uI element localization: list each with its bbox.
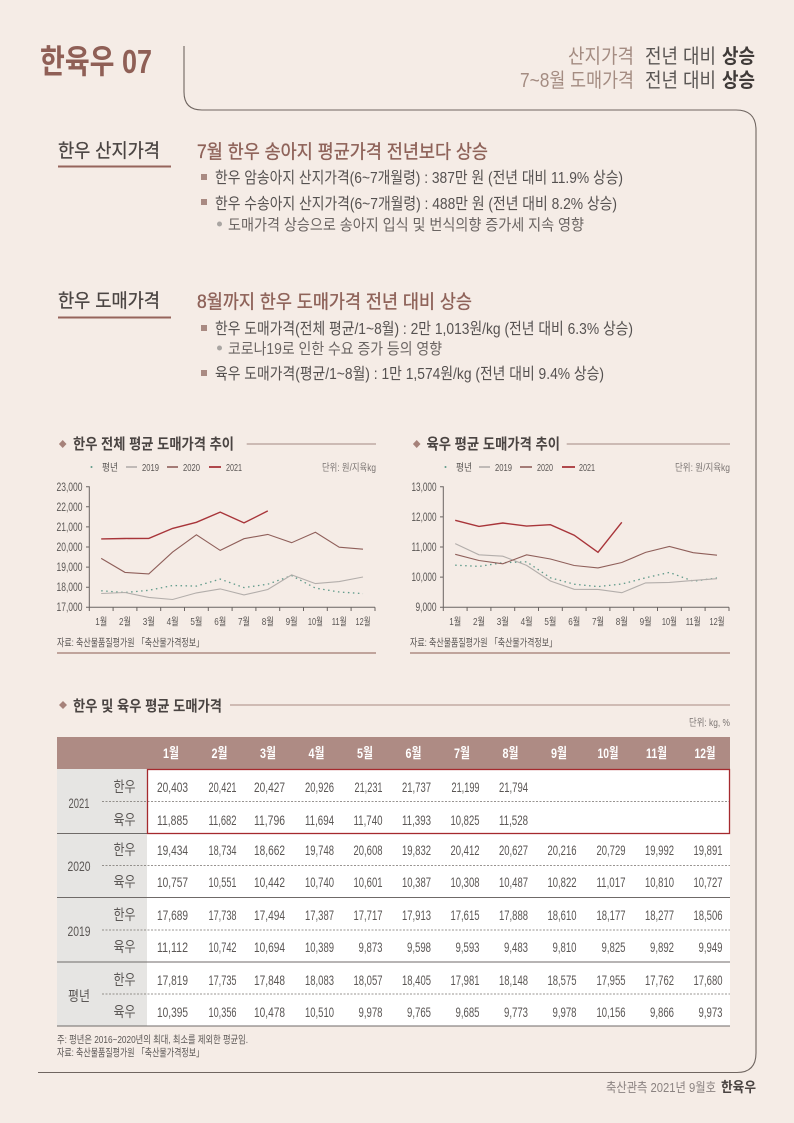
table header: 6월	[406, 745, 422, 761]
table header: 4월	[308, 745, 324, 761]
row group: 2021: 11,796	[254, 813, 285, 828]
row group: 2020: 10,740	[305, 875, 334, 890]
x axis labels: beef cattle: 10월	[662, 616, 677, 628]
x axis labels: hanwoo: 8월	[262, 616, 274, 628]
header summary	[520, 45, 755, 92]
line: hanwoo 2020	[101, 532, 363, 574]
legend: hanwoo	[90, 461, 376, 474]
header summary: 상승	[722, 45, 755, 68]
legend: hanwoo: 평년	[102, 462, 118, 474]
row group: 2020: 한우	[114, 842, 136, 859]
table header: 9월	[551, 745, 567, 761]
row group: 2020: 20,627	[499, 843, 528, 858]
row group: normal year: 9,978	[358, 1005, 382, 1020]
note: wholesale cause: 코로나19로 인한 수요 증가 등의 영향	[228, 340, 442, 358]
row group: 2019: 9,598	[407, 940, 431, 955]
row group: 2021: 20,926	[305, 780, 334, 795]
panel: hanwoo calf price	[58, 140, 623, 234]
row group: 2019: 10,389	[305, 940, 334, 955]
x axis labels: hanwoo: 2월	[119, 616, 131, 628]
source: hanwoo chart: 자료: 축산물품질평가원 「축산물가격정보」	[57, 636, 204, 649]
row group: normal year: 평년	[68, 988, 90, 1004]
row group: 2021: 21,737	[402, 780, 431, 795]
table notes	[57, 1033, 248, 1059]
table header: 7월	[454, 745, 470, 761]
header summary: 상승	[722, 69, 755, 92]
note: calf cause: 도매가격 상승으로 송아지 입식 및 번식의향 증가세 지속 영향	[228, 216, 584, 234]
row group: 2020: 10,822	[548, 875, 576, 890]
row group: 2021: 20,427	[254, 780, 285, 795]
row group: 2021	[68, 779, 528, 829]
row group: 2020: 10,551	[208, 875, 236, 890]
table header: 11월	[646, 745, 667, 761]
x axis labels: beef cattle: 6월	[568, 616, 580, 628]
x axis labels: hanwoo: 1월	[95, 616, 107, 628]
row group: 2021: 11,393	[402, 813, 431, 828]
footer: 축산관측 2021년 9월호	[606, 1080, 716, 1095]
row group: normal year: 9,866	[650, 1005, 674, 1020]
row group: 2019: 17,717	[354, 908, 382, 923]
heading: calf price: 한우 산지가격	[58, 140, 160, 162]
row group: 2021: 11,740	[354, 813, 382, 828]
row group: 2019: 2019	[68, 923, 91, 939]
row group: 2020: 18,734	[208, 843, 237, 858]
data table	[57, 737, 730, 1026]
row group: 2019: 9,873	[358, 940, 382, 955]
y axis labels: hanwoo: 23,000	[56, 482, 82, 494]
subheading: wholesale price: 8월까지 한우 도매가격 전년 대비 상승	[197, 291, 472, 313]
row group: 2020: 11,017	[596, 875, 626, 890]
row group: normal year: 10,478	[254, 1005, 285, 1020]
x axis labels: hanwoo: 9월	[286, 616, 298, 628]
y axis labels: beef cattle: 9,000	[416, 602, 436, 614]
row group: normal year: 17,848	[254, 973, 285, 988]
row group: normal year: 9,685	[456, 1005, 480, 1020]
row group: 2019: 10,742	[208, 940, 236, 955]
row group: 2020: 20,608	[354, 843, 382, 858]
table header	[57, 737, 730, 769]
x axis labels: hanwoo: 10월	[308, 616, 323, 628]
chart: hanwoo wholesale trend	[56, 436, 376, 653]
x axis labels: hanwoo: 7월	[238, 616, 250, 628]
y axis labels: hanwoo: 20,000	[56, 542, 82, 554]
row group: normal year: 10,156	[596, 1005, 626, 1020]
row group: 2020: 2020	[68, 858, 91, 874]
row group: 2021: 21,231	[354, 780, 382, 795]
row group: 2021: 20,421	[208, 780, 236, 795]
row group: normal year: 9,978	[552, 1005, 576, 1020]
x axis labels: beef cattle: 5월	[544, 616, 556, 628]
x axis labels: hanwoo: 3월	[143, 616, 155, 628]
row group: normal year: 17,680	[694, 973, 722, 988]
row group: 2020: 10,487	[499, 875, 528, 890]
x axis labels: beef cattle: 1월	[449, 616, 461, 628]
row group: 2019	[68, 907, 722, 956]
row group: normal year: 17,735	[208, 973, 236, 988]
line: hanwoo 2019	[101, 575, 363, 600]
row group: 2020: 20,412	[450, 843, 480, 858]
table heading: 한우 및 육우 평균 도매가격	[73, 698, 222, 715]
row group: 2020: 10,810	[645, 875, 674, 890]
row group: 2019: 9,483	[504, 940, 528, 955]
row group: 2019: 18,610	[548, 908, 576, 923]
row group: 2020: 10,757	[157, 875, 188, 890]
row group: 2019: 18,506	[694, 908, 722, 923]
bullet: female calf: 한우 암송아지 산지가격(6~7개월령) : 387만 원 (전년 대비 11.9% 상승)	[215, 169, 623, 187]
x axis labels: hanwoo: 4월	[167, 616, 179, 628]
row group: normal year: 한우	[114, 972, 136, 989]
row group: 2019: 18,277	[645, 908, 674, 923]
header summary: 7~8월 도매가격	[520, 69, 634, 92]
row group: 2021: 21,794	[499, 780, 528, 795]
row group: 2021: 2021	[68, 795, 90, 811]
row group: 2019: 9,593	[456, 940, 480, 955]
x axis labels: beef cattle: 12월	[710, 616, 724, 628]
y axis labels: beef cattle: 12,000	[412, 512, 436, 524]
row group: 2021: 11,694	[305, 813, 334, 828]
axes: beef cattle	[440, 487, 729, 611]
table notes: 자료: 축산물품질평가원 「축산물가격정보」	[57, 1046, 204, 1059]
line: hanwoo 2021	[101, 511, 268, 539]
footer: 한육우	[721, 1079, 756, 1095]
row group: normal year: 18,575	[548, 973, 576, 988]
row group: 2021: 육우	[114, 813, 136, 829]
row group: 2019: 17,689	[157, 908, 188, 923]
row group: 2020: 10,387	[402, 875, 431, 890]
row group: 2021: 11,885	[157, 813, 188, 828]
row group: normal year: 17,955	[596, 973, 626, 988]
row group: 2019: 한우	[114, 907, 136, 924]
row group: normal year: 육우	[114, 1005, 136, 1021]
row group: 2021: 21,199	[452, 780, 480, 795]
row group: 2019: 17,738	[208, 908, 236, 923]
line: beef cattle 2021	[455, 520, 622, 552]
row group: 2020: 19,748	[305, 843, 334, 858]
x axis labels: beef cattle: 11월	[686, 616, 701, 628]
chart: beef cattle wholesale trend	[410, 436, 730, 653]
row group: 2020: 10,727	[694, 875, 722, 890]
row group: 2019: 17,913	[402, 908, 431, 923]
row group: 2019: 17,888	[499, 908, 528, 923]
row group: normal year: 17,981	[450, 973, 480, 988]
row group: 2019: 육우	[114, 940, 136, 956]
row group: normal year: 18,148	[499, 973, 528, 988]
row group: 2021: 20,403	[157, 780, 188, 795]
table heading: 단위: kg, %	[689, 716, 730, 729]
y axis labels: hanwoo: 17,000	[56, 602, 82, 614]
legend: beef cattle: 2019	[495, 463, 512, 474]
line: beef cattle 2019	[455, 544, 717, 593]
row group: 2020: 19,992	[645, 843, 674, 858]
chart title: hanwoo: 한우 전체 평균 도매가격 추이	[73, 436, 234, 453]
axes: hanwoo	[86, 487, 375, 611]
legend: beef cattle: 2021	[579, 463, 595, 474]
row group: 2020: 19,832	[402, 843, 431, 858]
header summary: 산지가격	[568, 45, 634, 68]
y axis labels: beef cattle: 13,000	[412, 482, 436, 494]
heading: wholesale price: 한우 도매가격	[58, 290, 160, 312]
row group: normal year: 17,762	[645, 973, 674, 988]
y axis labels: beef cattle: 11,000	[412, 542, 436, 554]
row group: normal year: 10,356	[208, 1005, 236, 1020]
header summary: 전년 대비	[645, 69, 716, 92]
line: beef cattle 2020	[455, 546, 717, 568]
x axis labels: hanwoo	[95, 616, 370, 628]
table notes: 주: 평년은 2016~2020년의 최대, 최소를 제외한 평균임.	[57, 1033, 248, 1046]
row group: normal year: 10,510	[305, 1005, 334, 1020]
line: beef cattle normal year	[455, 562, 717, 587]
subheading: calf price: 7월 한우 송아지 평균가격 전년보다 상승	[197, 141, 488, 163]
row group: 2021: 11,528	[499, 813, 528, 828]
bullet: beef cattle wholesale: 육우 도매가격(평균/1~8월) : 1만 1,574원/kg (전년 대비 9.4% 상승)	[215, 365, 604, 383]
x axis labels: hanwoo: 6월	[214, 616, 226, 628]
legend: beef cattle	[444, 461, 730, 474]
row group: 2019: 10,694	[254, 940, 285, 955]
x axis labels: hanwoo: 11월	[332, 616, 347, 628]
row group: normal year: 17,819	[157, 973, 188, 988]
legend: hanwoo: 2019	[142, 463, 159, 474]
panel: hanwoo wholesale price	[58, 290, 633, 383]
row group: 2020: 10,442	[254, 875, 285, 890]
row group: 2020: 18,662	[254, 843, 285, 858]
legend: beef cattle: 평년	[456, 462, 472, 474]
y axis labels: hanwoo: 19,000	[56, 562, 82, 574]
chart title: hanwoo	[59, 436, 376, 453]
row group: 2020: 19,434	[157, 843, 188, 858]
legend: beef cattle: 단위: 원/지육kg	[675, 461, 730, 474]
row group: 2021: 10,825	[450, 813, 480, 828]
row group: 2019: 9,810	[552, 940, 576, 955]
x axis labels: beef cattle	[449, 616, 724, 628]
title: 한육우 07	[40, 43, 152, 80]
row group: 2020: 10,308	[450, 875, 480, 890]
row group: normal year: 10,395	[157, 1005, 188, 1020]
table header: 2월	[212, 745, 228, 761]
row group: normal year: 9,773	[504, 1005, 528, 1020]
row group: normal year	[68, 972, 722, 1021]
row group: 2019: 9,949	[698, 940, 722, 955]
legend: hanwoo: 2020	[183, 463, 200, 474]
row group: 2020: 20,729	[596, 843, 626, 858]
row group: 2020	[68, 842, 722, 891]
bullet: male calf: 한우 수송아지 산지가격(6~7개월령) : 488만 원 (전년 대비 8.2% 상승)	[215, 195, 617, 213]
x axis labels: beef cattle: 3월	[497, 616, 509, 628]
x axis labels: beef cattle: 4월	[521, 616, 533, 628]
table header: 5월	[357, 745, 373, 761]
row group: 2019: 9,892	[650, 940, 674, 955]
y axis labels: hanwoo: 18,000	[56, 582, 82, 594]
row group: normal year: 9,765	[407, 1005, 431, 1020]
chart title: beef cattle: 육우 평균 도매가격 추이	[426, 436, 560, 453]
row group: 2021: 11,682	[208, 813, 236, 828]
row group: 2020: 육우	[114, 875, 136, 891]
x axis labels: hanwoo: 5월	[190, 616, 202, 628]
chart title: beef cattle	[413, 436, 730, 453]
row group: 2020: 20,216	[548, 843, 576, 858]
x axis labels: hanwoo: 12월	[356, 616, 370, 628]
x axis labels: beef cattle: 7월	[592, 616, 604, 628]
source: beef cattle chart: 자료: 축산물품질평가원 「축산물가격정보」	[410, 636, 557, 649]
table header: 3월	[260, 745, 276, 761]
row group: 2019: 17,615	[450, 908, 480, 923]
bullet: hanwoo wholesale: 한우 도매가격(전체 평균/1~8월) : 2만 1,013원/kg (전년 대비 6.3% 상승)	[215, 320, 633, 338]
table heading	[59, 698, 730, 729]
table header: 12월	[694, 745, 716, 761]
table header: 8월	[502, 745, 518, 761]
row group: 2021: 한우	[114, 779, 136, 796]
row group: normal year: 9,973	[698, 1005, 722, 1020]
y axis labels: hanwoo	[56, 482, 82, 614]
row group: 2019: 17,494	[254, 908, 285, 923]
row group: 2019: 17,387	[305, 908, 334, 923]
row group: normal year: 18,083	[305, 973, 334, 988]
x axis labels: beef cattle: 9월	[640, 616, 652, 628]
header summary: 전년 대비	[645, 45, 716, 68]
y axis labels: beef cattle: 10,000	[412, 572, 436, 584]
x axis labels: beef cattle: 2월	[473, 616, 485, 628]
row group: 2019: 11,112	[157, 940, 188, 955]
y axis labels: hanwoo: 21,000	[56, 522, 82, 534]
legend: hanwoo: 2021	[226, 463, 242, 474]
y axis labels: beef cattle	[412, 482, 436, 614]
legend: beef cattle: 2020	[537, 463, 553, 474]
table header: 1월	[163, 745, 179, 761]
line: hanwoo normal year	[101, 576, 363, 594]
row group: 2019: 18,177	[596, 908, 626, 923]
table header: 10월	[598, 745, 618, 761]
x axis labels: beef cattle: 8월	[616, 616, 628, 628]
legend: hanwoo: 단위: 원/지육kg	[322, 461, 376, 474]
row group: 2020: 10,601	[354, 875, 382, 890]
row group: normal year: 18,405	[402, 973, 431, 988]
y axis labels: hanwoo: 22,000	[56, 502, 82, 514]
row group: normal year: 18,057	[354, 973, 382, 988]
row group: 2020: 19,891	[694, 843, 722, 858]
row group: 2019: 9,825	[602, 940, 626, 955]
